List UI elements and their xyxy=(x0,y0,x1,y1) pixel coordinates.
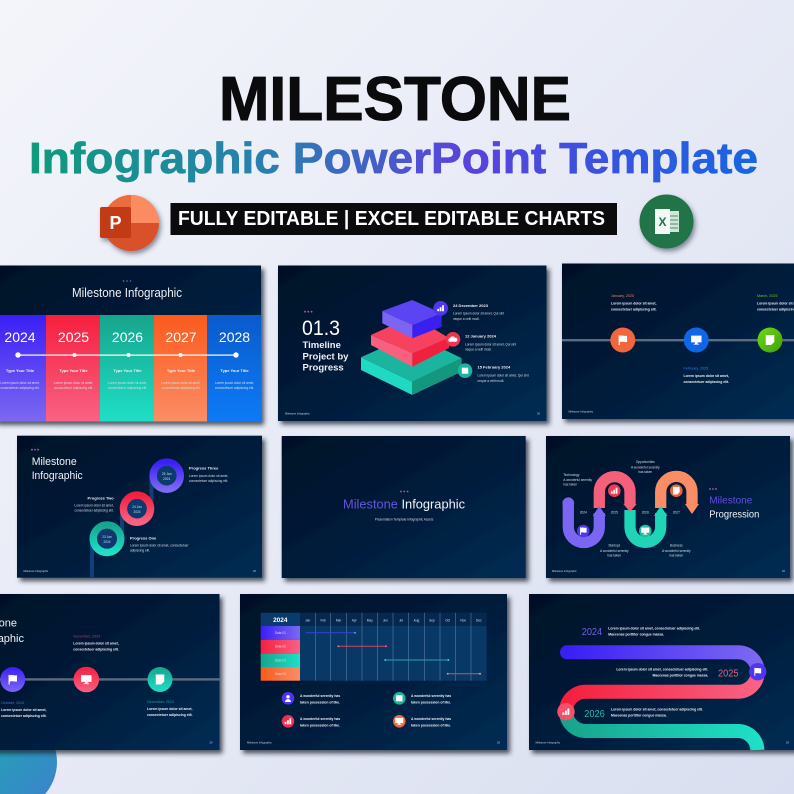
panel: slide 4 rising rings: Milestone Infographic xyxy=(24,569,49,573)
winding road bands xyxy=(566,652,758,750)
slide heading: Milestone Infographic xyxy=(72,286,182,300)
node: October: Lorem ipsum dolor sit amet, xyxy=(1,708,46,712)
month labels: Dec xyxy=(476,618,482,622)
node: November: Lorem ipsum dolor sit amet, xyxy=(73,642,119,646)
panel: slide 3 timeline 2025: Milestone Infographic xyxy=(568,410,594,414)
icon: cloud badge xyxy=(446,332,460,347)
label 2024: 2024 xyxy=(582,627,603,638)
ring: progress three: 25 Jan xyxy=(162,472,172,476)
label: opportunities: has taken xyxy=(638,470,652,474)
month labels: Jul xyxy=(399,618,403,622)
icon: PowerPoint logo: P xyxy=(109,213,122,233)
icon: Excel logo xyxy=(640,194,694,248)
milestone text 3: 15 February 2024 xyxy=(478,365,511,370)
node: December: December, 2024 xyxy=(147,700,174,704)
panel: slide 7 timeline 2024 xyxy=(0,594,220,750)
label: business: A wonderful serenity xyxy=(662,549,691,553)
label 2024: Lorem ipsum dolor sit amet, consectetuer adipiscing elit. xyxy=(608,626,700,630)
column 2026: Lorem ipsum dolor sit amet, xyxy=(108,381,147,385)
label: technology: has taken xyxy=(563,482,577,486)
column 2025 xyxy=(46,315,100,422)
section number: 01.3 xyxy=(302,317,340,340)
node: November: November, 2024 xyxy=(73,634,100,638)
column 2027: 2027 xyxy=(165,329,197,345)
label 2024 xyxy=(582,626,700,638)
column 2027 xyxy=(154,315,207,422)
node: January: January, 2025 xyxy=(611,294,634,298)
month labels: Nov xyxy=(460,618,466,622)
year labels: 2025 xyxy=(611,510,618,514)
year labels: 2024 xyxy=(580,510,587,514)
column 2025: Type Your Title xyxy=(59,368,88,373)
ring: progress one: Lorem ipsum dolor sit amet, consectetuer xyxy=(130,544,189,548)
column 2027: consectetuer adipiscing elit. xyxy=(161,386,201,390)
row labels: Data 03 xyxy=(275,658,286,662)
label: startups xyxy=(600,544,629,558)
node: February: Lorem ipsum dolor sit amet, xyxy=(684,374,729,378)
label: opportunities: Opportunities xyxy=(636,460,655,464)
row labels: Data 01 xyxy=(275,631,286,635)
label 2026: 2026 xyxy=(584,709,605,720)
label: startups: Startups xyxy=(608,544,621,548)
legend item: red xyxy=(282,715,340,728)
label: business xyxy=(662,544,691,558)
panel: slide 4 rising rings xyxy=(17,436,262,578)
timeline line with nodes xyxy=(15,352,239,358)
icon: chart node xyxy=(557,703,575,720)
node: November xyxy=(73,634,119,692)
column 2024: Type Your Title xyxy=(6,368,35,373)
slide heading: Infographic xyxy=(32,470,83,482)
year labels: 2027 xyxy=(673,510,680,514)
icon: PowerPoint logo xyxy=(100,195,159,251)
column 2027: Lorem ipsum dolor sit amet, xyxy=(161,381,201,385)
legend item: orange: taken possession of like. xyxy=(411,724,451,728)
panel: slide 9 winding road: 26 xyxy=(786,740,789,744)
label 2024: Maecenas porttitor congue massa. xyxy=(608,632,664,636)
node: October: consectetuer adipiscing elit. xyxy=(1,714,47,718)
ring: progress three xyxy=(153,462,228,489)
column 2026 xyxy=(100,315,154,422)
slide heading: Milestone xyxy=(32,456,77,468)
section heading: Progress xyxy=(302,362,344,374)
ring: progress two: consectetuer adipiscing elit. xyxy=(75,508,114,512)
node: December: consectetuer adipiscing elit. xyxy=(147,713,193,717)
milestone text 2: neque a velit modi. xyxy=(465,348,492,352)
label: technology: Technology xyxy=(563,473,580,477)
legend item: orange: A wonderful serenity has xyxy=(411,717,451,721)
column 2028: Type Your Title xyxy=(220,368,249,373)
month labels: May xyxy=(367,618,373,622)
node: February xyxy=(684,328,729,384)
legend item: purple: taken possession of like. xyxy=(300,700,340,704)
milestone text 1: Lorem Ipsum dolor sit amet, Qui sint xyxy=(453,312,504,316)
ring: progress two: Progress Two xyxy=(88,496,114,500)
panel: slide 2 timeline project stack: Milestone Infographic xyxy=(285,412,310,416)
icon: note badge xyxy=(670,484,683,497)
panel: slide 4 rising rings: 26 xyxy=(253,569,256,573)
serpentine arrow path xyxy=(562,476,699,542)
month labels: Feb xyxy=(320,618,326,622)
title: MILESTONE xyxy=(219,65,571,134)
label: opportunities: A wonderful serenity xyxy=(631,466,660,470)
node: January: Lorem ipsum dolor sit amet, xyxy=(611,302,656,306)
column 2026: consectetuer adipiscing elit. xyxy=(108,386,147,390)
node: November: consectetuer adipiscing elit. xyxy=(73,648,119,652)
ring: progress two: 24 Jan xyxy=(132,505,142,509)
label 2025: 2025 xyxy=(718,669,739,680)
section heading: Project by xyxy=(302,352,349,362)
milestone text 2: 12 January 2024 xyxy=(465,334,497,339)
milestone text 3: neque a velit modi. xyxy=(478,379,504,383)
milestone text 3 xyxy=(478,365,529,383)
slide heading cropped at the edge xyxy=(0,618,24,645)
column 2028: Lorem ipsum dolor sit amet, xyxy=(215,381,254,385)
ring: progress three: Progress Three xyxy=(189,466,219,470)
ring: progress one xyxy=(93,525,189,552)
legend item: orange xyxy=(393,715,451,728)
label 2025: Lorem ipsum dolor sit amet, consectetuer adipiscing elit. xyxy=(616,668,708,672)
label 2026: Maecenas porttitor congue massa. xyxy=(611,714,667,718)
column 2028: 2028 xyxy=(219,329,250,345)
gantt chart: 2024 xyxy=(273,617,288,624)
milestone text 1: neque a velit modi. xyxy=(453,317,480,321)
node: January: consectetuer adipiscing elit. xyxy=(611,308,657,312)
month labels: Mar xyxy=(336,618,342,622)
legend item: red: A wonderful serenity has xyxy=(300,717,340,721)
label: technology: A wonderful serenity xyxy=(563,478,592,482)
label: opportunities xyxy=(631,460,660,474)
slide heading: Milestone xyxy=(709,494,752,506)
slide heading xyxy=(709,494,759,520)
panel: slide 3 timeline 2025 xyxy=(562,264,794,419)
month labels: Apr xyxy=(352,618,358,622)
column 2024: 2024 xyxy=(4,329,36,345)
month labels: Jan xyxy=(305,618,310,622)
label 2025 xyxy=(616,668,739,680)
node: January xyxy=(610,294,657,352)
slide subheading: Presentation Template Infographic Assets xyxy=(375,518,434,522)
ring: progress two: 2024 xyxy=(133,510,141,514)
panel: slide 1 yearly columns xyxy=(0,266,261,422)
label: technology xyxy=(563,473,592,486)
legend item: teal xyxy=(393,692,451,705)
banner: fully editable xyxy=(170,203,617,235)
ring: progress three: 2024 xyxy=(163,477,170,481)
ring: progress one: 2024 xyxy=(103,540,111,544)
icon: calendar badge xyxy=(458,363,472,378)
slide heading: Progression xyxy=(709,508,759,520)
ring: progress two: Lorem ipsum dolor sit amet, xyxy=(74,504,114,508)
milestone text 1 xyxy=(453,303,504,321)
column 2024 xyxy=(0,315,46,422)
section heading: Timeline xyxy=(302,340,341,351)
legend item: teal: A wonderful serenity has xyxy=(411,694,451,698)
month labels: Jun xyxy=(383,618,388,622)
label 2025: Maecenas porttitor congue massa. xyxy=(653,674,708,678)
column 2024: Lorem ipsum dolor sit amet, xyxy=(0,381,40,385)
year labels: 2026 xyxy=(642,510,649,514)
node: October: October, 2024 xyxy=(1,701,24,705)
panel: slide 8 gantt chart xyxy=(240,594,507,750)
ring: progress two xyxy=(74,495,150,522)
icon: flag badge xyxy=(577,525,590,537)
ring: progress three: consectetuer adipiscing elit. xyxy=(189,479,228,483)
ring: progress one: Progress One xyxy=(130,536,157,540)
node: December xyxy=(147,667,193,717)
ring: progress one: 23 Jan xyxy=(102,535,112,539)
panel: slide 5 section title xyxy=(282,436,526,578)
panel: slide 9 winding road xyxy=(529,594,794,750)
legend item: red: taken possession of like. xyxy=(300,724,340,728)
row labels xyxy=(261,626,300,681)
panel: slide 8 gantt chart: 26 xyxy=(497,740,500,744)
column 2027: Type Your Title xyxy=(167,368,196,373)
decorative blob bottom left xyxy=(0,713,57,794)
panel: slide 8 gantt chart: Milestone Infographic xyxy=(247,740,272,744)
column 2028 xyxy=(207,315,261,422)
row labels: Data 04 xyxy=(275,672,286,676)
node: March xyxy=(757,294,794,352)
month labels: Sep xyxy=(429,618,435,622)
panel: slide 6 milestone progression: 26 xyxy=(782,569,785,573)
icon: chart badge xyxy=(433,301,448,316)
node: February: consectetuer adipiscing elit. xyxy=(684,380,729,384)
month labels: Oct xyxy=(445,618,450,622)
month labels: Aug xyxy=(414,618,420,622)
milestone text 2: Lorem Ipsum dolor sit amet, Qui sint xyxy=(465,342,516,346)
node: February: February, 2025 xyxy=(684,366,708,370)
month labels xyxy=(305,618,482,622)
label: business: has taken xyxy=(669,554,683,558)
icon: monitor badge xyxy=(639,525,652,537)
panel: slide 2 timeline project stack: 26 xyxy=(537,412,540,416)
panel: slide 6 milestone progression xyxy=(546,436,790,578)
row labels: Data 02 xyxy=(275,645,286,649)
milestone text 1: 24 December 2023 xyxy=(453,303,489,308)
label: startups: A wonderful serenity xyxy=(600,549,629,553)
node: December: Lorem ipsum dolor sit amet, xyxy=(147,707,192,711)
ring: progress three: Lorem ipsum dolor sit amet, xyxy=(189,474,228,478)
ring: progress one: adipiscing elit. xyxy=(130,548,150,552)
legend item: purple: A wonderful serenity has xyxy=(300,694,340,698)
node: October xyxy=(0,667,47,718)
label: business: Business xyxy=(670,544,683,548)
panel: slide 2 timeline project stack xyxy=(278,266,546,421)
label: startups: has taken xyxy=(607,554,621,558)
icon: flag node xyxy=(749,663,766,680)
icon: Excel logo: X xyxy=(658,215,667,229)
slide heading xyxy=(32,456,83,482)
slide heading: Milestone Infographic xyxy=(343,496,465,511)
label 2026 xyxy=(584,708,703,720)
column 2024: consectetuer adipiscing elit. xyxy=(0,386,40,390)
banner: fully editable: FULLY EDITABLE | EXCEL EDITABLE CHARTS xyxy=(178,208,605,230)
label 2026: Lorem ipsum dolor sit amet, consectetuer adipiscing elit. xyxy=(611,708,703,712)
panel: slide 7 timeline 2024: 26 xyxy=(210,740,213,744)
node: March: March, 2025 xyxy=(757,294,778,298)
panel: slide 9 winding road: Milestone Infographic xyxy=(536,740,561,744)
milestone text 2 xyxy=(465,334,516,352)
column 2025: 2025 xyxy=(58,329,89,345)
column 2026: 2026 xyxy=(112,329,143,345)
legend item: purple xyxy=(282,692,340,705)
section heading xyxy=(302,340,349,374)
column 2025: Lorem ipsum dolor sit amet, xyxy=(54,381,93,385)
isometric stack chart xyxy=(361,300,462,395)
panel: slide 6 milestone progression: Milestone Infographic xyxy=(552,569,577,573)
subtitle: Infographic PowerPoint Template xyxy=(29,134,758,183)
icon: chart badge xyxy=(608,484,621,497)
gantt bars xyxy=(306,632,481,675)
legend item: teal: taken possession of like. xyxy=(411,700,451,704)
column 2025: consectetuer adipiscing elit. xyxy=(54,386,93,390)
column 2026: Type Your Title xyxy=(113,368,142,373)
year labels xyxy=(580,510,680,514)
milestone text 3: Lorem Ipsum dolor sit amet, Qui sint xyxy=(478,374,529,378)
gantt chart xyxy=(261,613,487,681)
column 2028: consectetuer adipiscing elit. xyxy=(215,386,254,390)
